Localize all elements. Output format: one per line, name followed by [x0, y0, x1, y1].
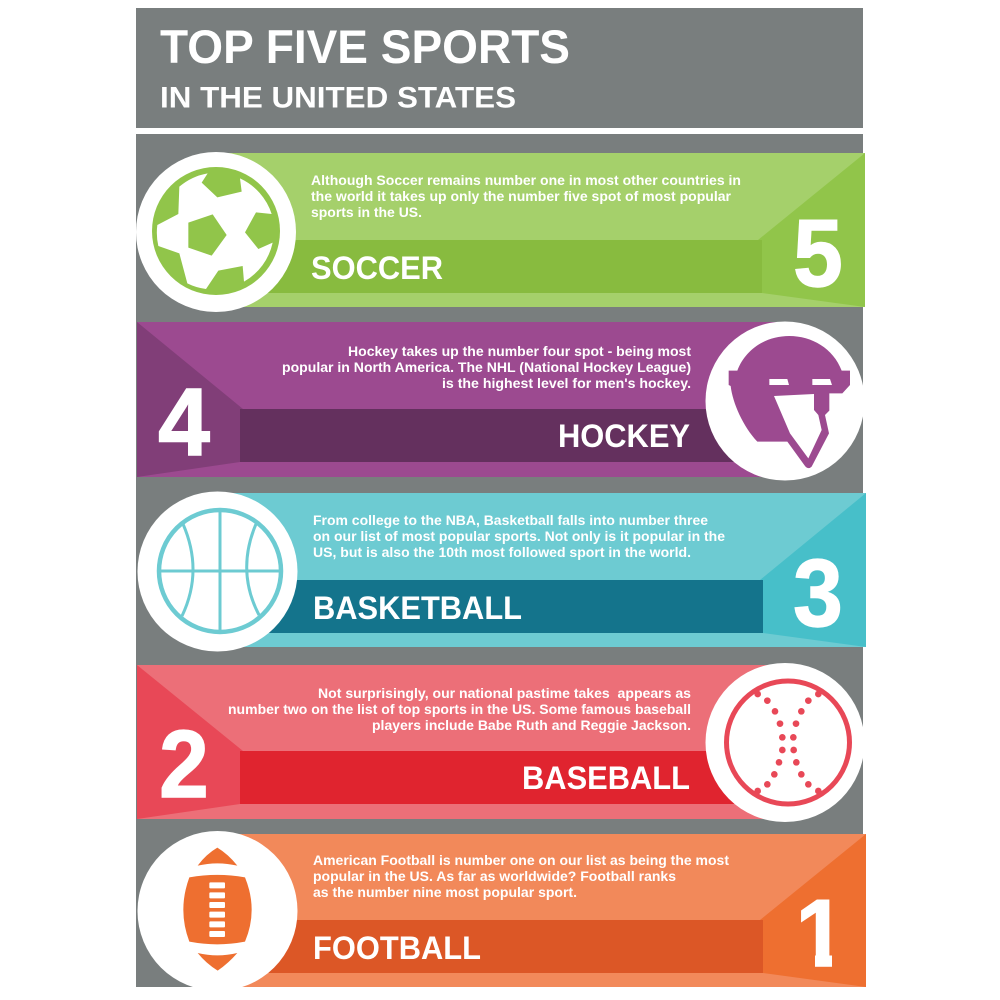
title: TOP FIVE SPORTS: [160, 20, 570, 73]
panel: basketball: [138, 492, 866, 652]
soccer description: sports in the US.: [311, 205, 422, 220]
hockey description: Hockey takes up the number four spot - being most: [348, 344, 691, 359]
rank 1: 1: [796, 879, 845, 987]
rank 2: 2: [159, 710, 209, 818]
soccer name: SOCCER: [311, 250, 443, 286]
soccer description: Although Soccer remains number one in most other countries in: [311, 173, 741, 188]
icon: hockey helmet: [706, 322, 864, 480]
football description: American Football is number one on our list as being the most: [313, 853, 729, 868]
rank 5: 5: [793, 199, 843, 307]
basketball description: US, but is also the 10th most followed sport in the world.: [313, 545, 691, 560]
hockey description: is the highest level for men's hockey.: [442, 376, 691, 391]
panel: football: [138, 831, 866, 991]
icon: basketball: [138, 492, 298, 652]
football description: popular in the US. As far as worldwide? Football ranks: [313, 869, 676, 884]
body background panel: [136, 134, 863, 987]
football description: as the number nine most popular sport.: [313, 885, 577, 900]
soccer description: the world it takes up only the number five spot of most popular: [311, 189, 732, 204]
header panel: [136, 8, 863, 128]
basketball description: on our list of most popular sports. Not only is it popular in the: [313, 529, 725, 544]
basketball description: From college to the NBA, Basketball falls into number three: [313, 513, 708, 528]
panel: baseball: [137, 663, 864, 822]
baseball description: Not surprisingly, our national pastime takes appears as: [318, 686, 691, 701]
icon: football: [138, 831, 298, 991]
icon: soccer ball: [136, 152, 296, 312]
hockey name: HOCKEY: [558, 418, 690, 454]
rank 3: 3: [793, 539, 843, 647]
subtitle: IN THE UNITED STATES: [160, 82, 516, 114]
hockey description: popular in North America. The NHL (National Hockey League): [282, 360, 691, 375]
baseball description: number two on the list of top sports in the US. Some famous baseball: [228, 702, 691, 717]
basketball name: BASKETBALL: [313, 590, 522, 626]
baseball description: players include Babe Ruth and Reggie Jackson.: [372, 718, 691, 733]
football name: FOOTBALL: [313, 930, 481, 966]
panel: hockey: [137, 322, 864, 480]
icon: baseball: [706, 663, 864, 822]
baseball name: BASEBALL: [522, 760, 690, 796]
panel: soccer: [136, 152, 865, 312]
rank 4: 4: [158, 369, 210, 476]
